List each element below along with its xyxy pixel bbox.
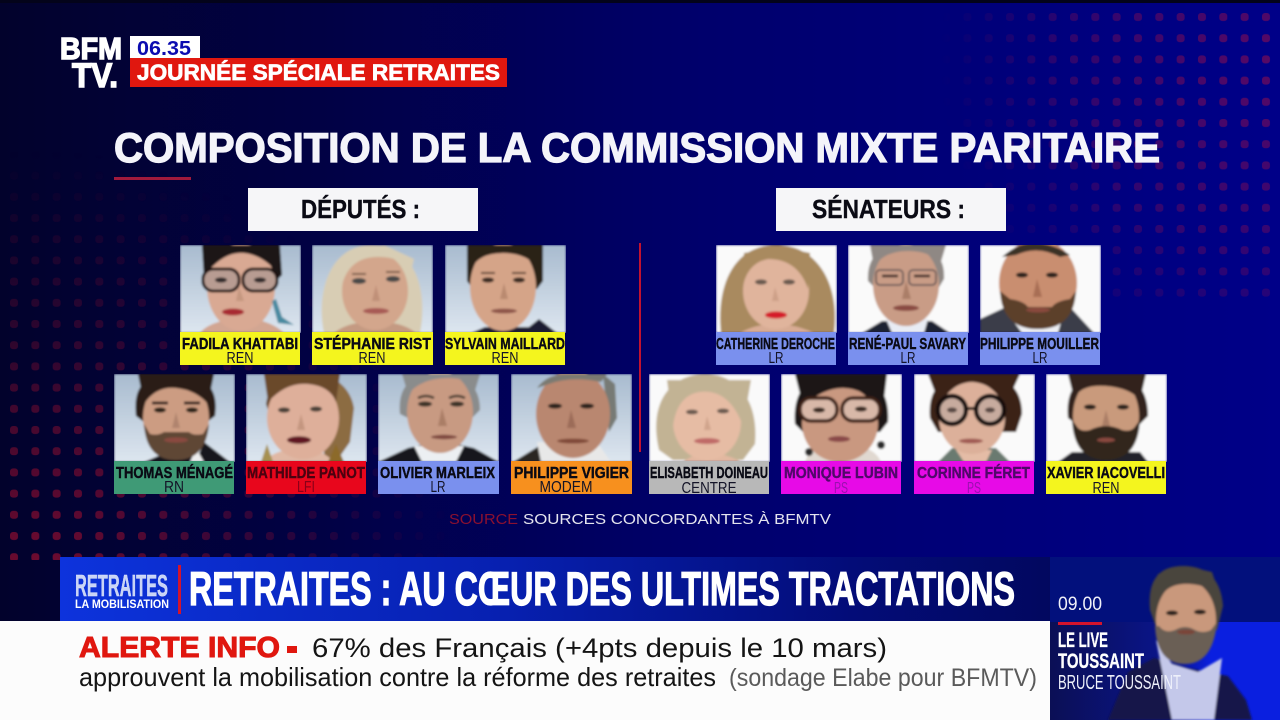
alert ticker (0, 621, 1050, 720)
alert ticker: 67% des Français (+4pts depuis le 10 mars) (312, 633, 887, 663)
programme text: LE LIVE (1058, 629, 1108, 652)
alert ticker: ALERTE INFO (79, 632, 280, 664)
title underline (114, 177, 191, 180)
card: Mathilde Panot: LFI (297, 479, 315, 496)
programme text: 09.00 (1058, 594, 1102, 615)
card: Thomas Ménagé: THOMAS MÉNAGÉ (116, 465, 233, 482)
headline band (60, 557, 1050, 621)
card: Catherine Deroche: LR (768, 350, 784, 367)
card: Sylvain Maillard (445, 243, 566, 367)
card: Monique Lubin: PS (834, 480, 848, 497)
banner: journée spéciale: JOURNÉE SPÉCIALE RETRAITES (137, 60, 500, 85)
vertical divider (639, 243, 641, 452)
card: René-Paul Savary (848, 244, 969, 367)
programme text: BRUCE TOUSSAINT (1058, 672, 1181, 694)
card: Stéphanie Rist: REN (358, 350, 386, 367)
card: Xavier Iacovelli: XAVIER IACOVELLI (1047, 465, 1165, 482)
heading: députés (248, 188, 478, 231)
alert ticker: approuvent la mobilisation contre la réforme des retraites (79, 662, 716, 692)
programme text: TOUSSAINT (1058, 650, 1144, 673)
card: Elisabeth Doineau (649, 374, 770, 497)
card: Xavier Iacovelli (1046, 374, 1167, 497)
show logo: retraites la mobilisation: LA MOBILISATION (75, 597, 169, 611)
card: Philippe Mouiller: LR (1032, 350, 1048, 367)
card: René-Paul Savary: LR (900, 350, 916, 367)
card: Catherine Deroche: CATHERINE DEROCHE (716, 336, 835, 353)
clock: 06.35: 06.35 (137, 38, 191, 60)
card: Olivier Marleix: OLIVIER MARLEIX (380, 465, 496, 482)
card: Corinne Féret: PS (967, 480, 981, 497)
card: Corinne Féret (914, 374, 1035, 497)
card: Elisabeth Doineau: CENTRE (682, 480, 736, 497)
card: Philippe Mouiller: PHILIPPE MOUILLER (980, 336, 1099, 353)
next programme panel (1050, 557, 1280, 720)
card: Fadila Khattabi: REN (226, 350, 254, 367)
card: Thomas Ménagé (114, 374, 235, 496)
presenter portrait (1108, 566, 1252, 720)
card: Fadila Khattabi (180, 243, 301, 367)
heading: députés: DÉPUTÉS : (301, 194, 420, 224)
card: Monique Lubin: MONIQUE LUBIN (784, 465, 898, 482)
background (0, 0, 1280, 560)
show logo: retraites la mobilisation: RETRAITES (75, 568, 168, 603)
card: Philippe Vigier (511, 370, 632, 496)
heading: sénateurs (776, 188, 1006, 231)
source line: SOURCE (449, 511, 518, 528)
logo: BFM TV (60, 31, 122, 95)
card: Monique Lubin (781, 374, 902, 497)
card: Stéphanie Rist: STÉPHANIE RIST (314, 336, 431, 353)
heading: sénateurs: SÉNATEURS : (812, 194, 965, 224)
card: Stéphanie Rist (312, 245, 433, 367)
card: Olivier Marleix (378, 371, 499, 496)
card: Fadila Khattabi: FADILA KHATTABI (182, 336, 298, 353)
card: Catherine Deroche (716, 245, 837, 367)
alert ticker: (sondage Elabe pour BFMTV) (729, 664, 1037, 692)
title: COMPOSITION DE LA COMMISSION MIXTE PARITAIRE (114, 124, 1160, 171)
card: Philippe Vigier: PHILIPPE VIGIER (514, 465, 629, 482)
logo: BFM TV: TV. (72, 57, 118, 95)
card: Xavier Iacovelli: REN (1092, 480, 1120, 497)
card: Corinne Féret: CORINNE FÉRET (917, 465, 1030, 482)
programme text (1058, 594, 1181, 694)
card: Thomas Ménagé: RN (164, 479, 184, 496)
clock: 06.35 (130, 36, 200, 60)
card: René-Paul Savary: RENÉ-PAUL SAVARY (849, 336, 966, 353)
card: Philippe Mouiller (980, 239, 1101, 367)
card: Sylvain Maillard: REN (492, 350, 518, 367)
show logo: retraites la mobilisation (75, 568, 169, 611)
card: Mathilde Panot (246, 374, 367, 496)
card: Sylvain Maillard: SYLVAIN MAILLARD (445, 336, 565, 353)
card: Olivier Marleix: LR (430, 479, 446, 496)
logo: BFM TV: BFM (60, 31, 122, 66)
card: Elisabeth Doineau: ELISABETH DOINEAU (650, 465, 768, 482)
card: Mathilde Panot: MATHILDE PANOT (247, 465, 365, 482)
card: Philippe Vigier: MODEM (540, 479, 592, 496)
source line: SOURCES CONCORDANTES À BFMTV (523, 511, 831, 528)
